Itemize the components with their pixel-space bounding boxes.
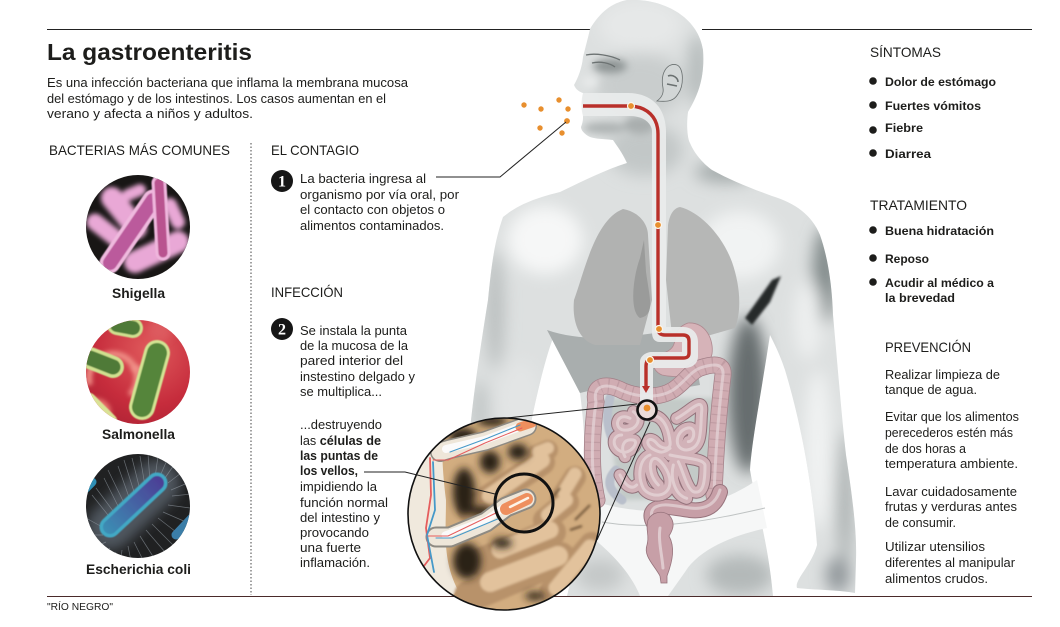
bacteria dots at mouth: [521, 97, 571, 136]
step 2 continuation text: impidiendo la: [300, 480, 377, 494]
digestive tract white band: [582, 93, 698, 404]
heart: [633, 240, 650, 318]
callout line: vellos to lens: [364, 472, 495, 494]
step 2 badge: [271, 318, 293, 340]
step 2 text: se multiplica...: [300, 385, 382, 399]
heading: infeccion: INFECCIÓN: [271, 284, 343, 300]
intro text: [47, 76, 408, 121]
step 2 continuation text: provocando: [300, 526, 369, 540]
stomach: [653, 323, 712, 376]
route dots: [628, 102, 662, 364]
bottom rule: [47, 596, 1032, 597]
text: prevencion: Evitar que los alimentos: [885, 410, 1019, 424]
list: sintomas: Dolor de estómago: [885, 75, 996, 89]
text: prevencion: diferentes al manipular: [885, 556, 1015, 570]
magnified villi lens: [407, 417, 601, 611]
dotted column divider: [250, 143, 252, 595]
step 2 continuation text: las puntas de: [300, 449, 378, 463]
label: Escherichia coli: Escherichia coli: [86, 562, 191, 577]
heading: bacterias: BACTERIAS MÁS COMUNES: [49, 142, 230, 158]
body silhouette with shading: [450, 0, 860, 605]
step 2 continuation text: inflamación.: [300, 556, 370, 570]
lung left: [574, 209, 652, 345]
step 1 text: [300, 172, 459, 233]
step 2 continuation text: del intestino y: [300, 511, 381, 525]
tan villi fingers: [470, 448, 592, 596]
step 2 continuation text: [300, 418, 388, 570]
step 1 badge: [271, 170, 293, 192]
step 2 continuation text: una fuerte: [300, 541, 361, 555]
list: tratamiento: Buena hidratación: [885, 224, 994, 238]
intro text: verano y afecta a niños y adultos.: [47, 107, 253, 121]
heading: prevencion: PREVENCIÓN: [885, 339, 971, 355]
large intestine: [592, 365, 723, 530]
face: eye brow: [586, 54, 620, 67]
white villi tissue: [424, 423, 532, 572]
rectum highlight: [659, 528, 663, 568]
pale back loops: [608, 398, 622, 500]
list: sintomas: [869, 75, 996, 161]
armpit shadow right: [745, 276, 781, 325]
dark pockets: [449, 416, 545, 600]
step 1 text: La bacteria ingresa al: [300, 172, 426, 186]
text: prevencion: [885, 368, 1019, 586]
text: prevencion: frutas y verduras antes: [885, 500, 1017, 514]
left tissue column: [408, 454, 458, 595]
heading: tratamiento: TRATAMIENTO: [870, 197, 967, 213]
intro text: del estómago y de los intestinos. Los casos aumentan en el: [47, 92, 386, 106]
text: prevencion: perecederos estén más: [885, 426, 1013, 440]
step 2 text: de la mucosa de la: [300, 339, 408, 353]
text: prevencion: de consumir.: [885, 516, 956, 530]
face shading: [582, 59, 656, 134]
text: prevencion: alimentos crudos.: [885, 572, 988, 586]
heading: sintomas: SÍNTOMAS: [870, 44, 941, 60]
arrow head: [642, 386, 650, 393]
step 2 text: Se instala la punta: [300, 324, 407, 338]
intro text: Es una infección bacteriana que inflama la membrana mucosa: [47, 76, 408, 90]
list: sintomas: Diarrea: [885, 147, 931, 161]
step 2 continuation text: los vellos,: [300, 464, 358, 478]
panel: Escherichia coli photo: [86, 454, 190, 558]
veins: [424, 458, 431, 566]
step 2 continuation text: las células de: [300, 434, 381, 448]
step 1 badge: 1: [278, 174, 286, 190]
step 2 text: pared interior del: [300, 354, 403, 368]
face: ear: [657, 64, 682, 101]
text: prevencion: Realizar limpieza de: [885, 368, 1000, 382]
panel: Shigella photo: [86, 175, 190, 279]
step 2 continuation text: función normal: [300, 496, 388, 510]
text: prevencion: tanque de agua.: [885, 383, 977, 397]
step 2 text: instestino delgado y: [300, 370, 416, 384]
label: Salmonella: Salmonella: [102, 427, 175, 442]
step 1 text: organismo por vía oral, por: [300, 188, 459, 202]
step 2 badge: 2: [278, 322, 286, 338]
text: prevencion: Lavar cuidadosamente: [885, 485, 1017, 499]
list: tratamiento: Acudir al médico a: [885, 276, 994, 290]
human body illustration: [450, 0, 860, 605]
lens pointer lines: [507, 404, 650, 540]
step 2 text: [300, 324, 416, 399]
top rule left: [47, 29, 590, 30]
step 1 text: el contacto con objetos o: [300, 203, 445, 217]
lung right: [666, 207, 739, 338]
heading: el contagio: EL CONTAGIO: [271, 142, 359, 158]
text: prevencion: de dos horas a: [885, 442, 966, 456]
text: prevencion: Utilizar utensilios: [885, 540, 985, 554]
right side creases: [552, 488, 590, 530]
title: La gastroenteritis: [47, 39, 252, 65]
list: sintomas: Fuertes vómitos: [885, 99, 981, 113]
list: tratamiento: Reposo: [885, 252, 929, 266]
inner lens ring: [495, 474, 553, 532]
panel: Salmonella photo: [86, 320, 190, 424]
label: Shigella: Shigella: [112, 286, 166, 301]
callout line: contagio to mouth: [436, 122, 566, 177]
list: tratamiento: [869, 224, 994, 305]
top rule right: [702, 29, 1032, 30]
mesentery backdrop: [605, 398, 720, 500]
rectum: [646, 512, 673, 583]
abdomen liver shade: [547, 328, 700, 393]
list: tratamiento: la brevedad: [885, 291, 955, 305]
digestive tract red route: [583, 106, 689, 386]
step 2 continuation text: ...destruyendo: [300, 418, 382, 432]
text: prevencion: temperatura ambiente.: [885, 457, 1018, 471]
small intestine: [614, 404, 705, 498]
underwear: [585, 480, 767, 596]
source note: "RÍO NEGRO": [47, 600, 113, 613]
magnifier target circle: [638, 400, 656, 420]
step 1 text: alimentos contaminados.: [300, 219, 444, 233]
underwear waistband line: [602, 508, 765, 525]
list: sintomas: Fiebre: [885, 121, 923, 135]
